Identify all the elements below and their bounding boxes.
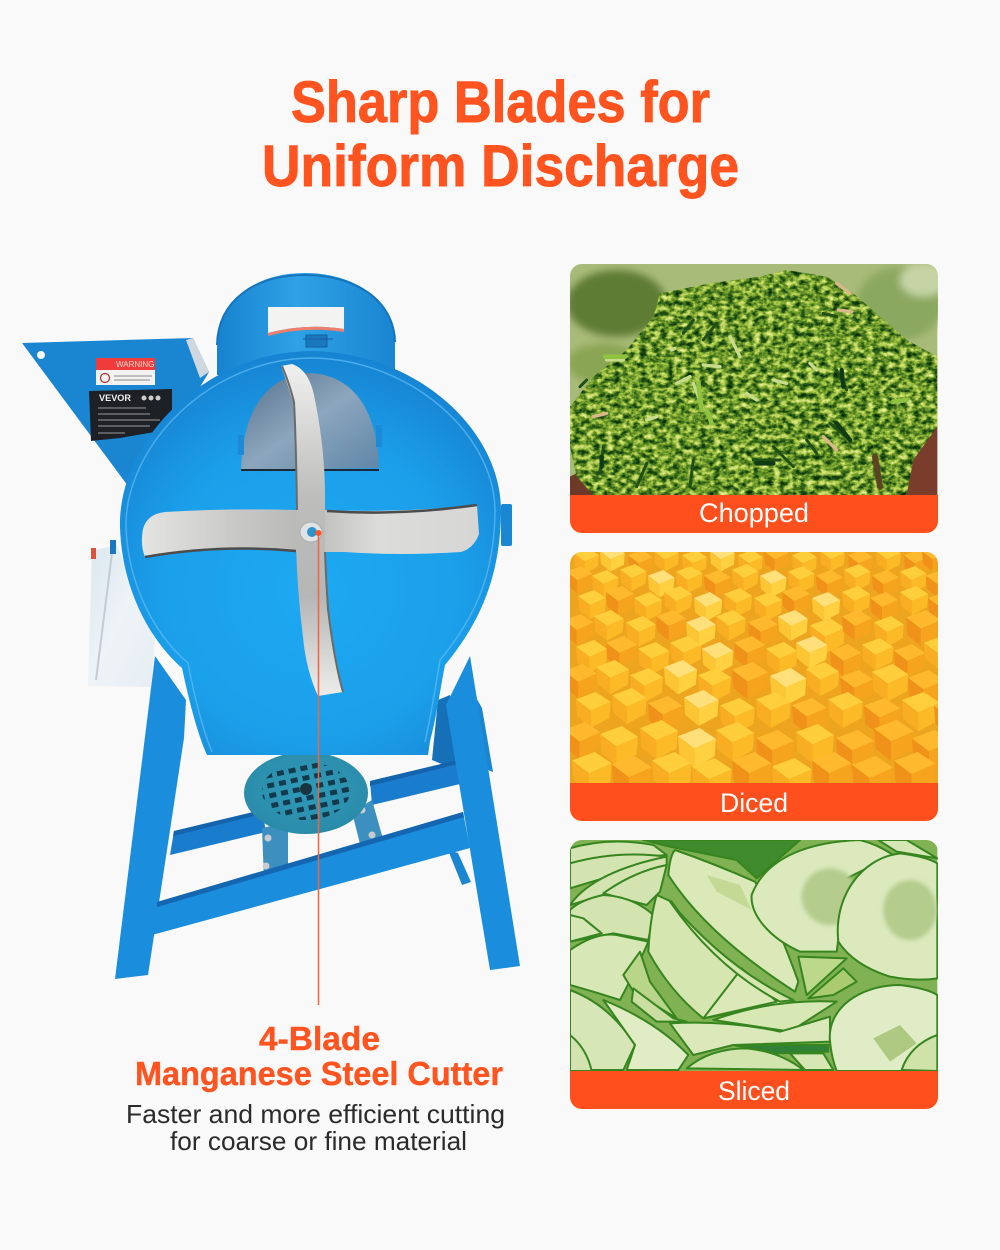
product illustration: chopper machine <box>22 273 520 979</box>
photo: cucumber slices <box>570 840 937 1073</box>
panel: chopped <box>563 263 947 533</box>
motor <box>244 752 368 834</box>
label bar: chopped <box>570 495 938 533</box>
panel: diced <box>570 552 938 821</box>
inspection window <box>238 373 382 470</box>
horizontal blade <box>142 505 479 557</box>
label bar: sliced <box>570 1071 938 1109</box>
title: Uniform Discharge <box>262 134 739 199</box>
motor mount brackets <box>262 800 385 880</box>
rear leg and plate <box>432 680 493 885</box>
photo: diced cubes <box>570 552 938 783</box>
hopper with labels <box>22 338 209 486</box>
label bar: chopped: Chopped <box>699 498 809 528</box>
callout description: Faster and more efficient cutting <box>126 1099 505 1129</box>
black spec plate: VEVOR <box>99 393 132 403</box>
title: Sharp Blades for <box>291 70 710 135</box>
callout description <box>126 1099 505 1156</box>
callout heading <box>135 1020 503 1092</box>
side collection box <box>88 540 155 687</box>
front legs <box>115 656 520 979</box>
callout heading: Manganese Steel Cutter <box>135 1055 503 1092</box>
upper cross braces <box>170 760 460 855</box>
main round housing <box>120 351 512 755</box>
black spec plate <box>89 389 172 441</box>
blade hub <box>300 522 322 542</box>
panel: sliced <box>570 840 938 1109</box>
warning label <box>96 358 155 385</box>
photo: chopped greens <box>563 263 947 497</box>
feed drum <box>217 273 395 375</box>
label bar: sliced: Sliced <box>718 1076 790 1106</box>
main cross bar <box>152 812 470 935</box>
callout heading: 4-Blade <box>259 1020 380 1057</box>
label bar: diced: Diced <box>720 788 788 818</box>
callout description: for coarse or fine material <box>170 1126 467 1156</box>
vertical blade <box>281 364 343 696</box>
title <box>262 70 739 199</box>
label bar: diced <box>570 783 938 821</box>
callout leader line <box>316 530 322 1005</box>
warning label: WARNING <box>116 360 154 369</box>
